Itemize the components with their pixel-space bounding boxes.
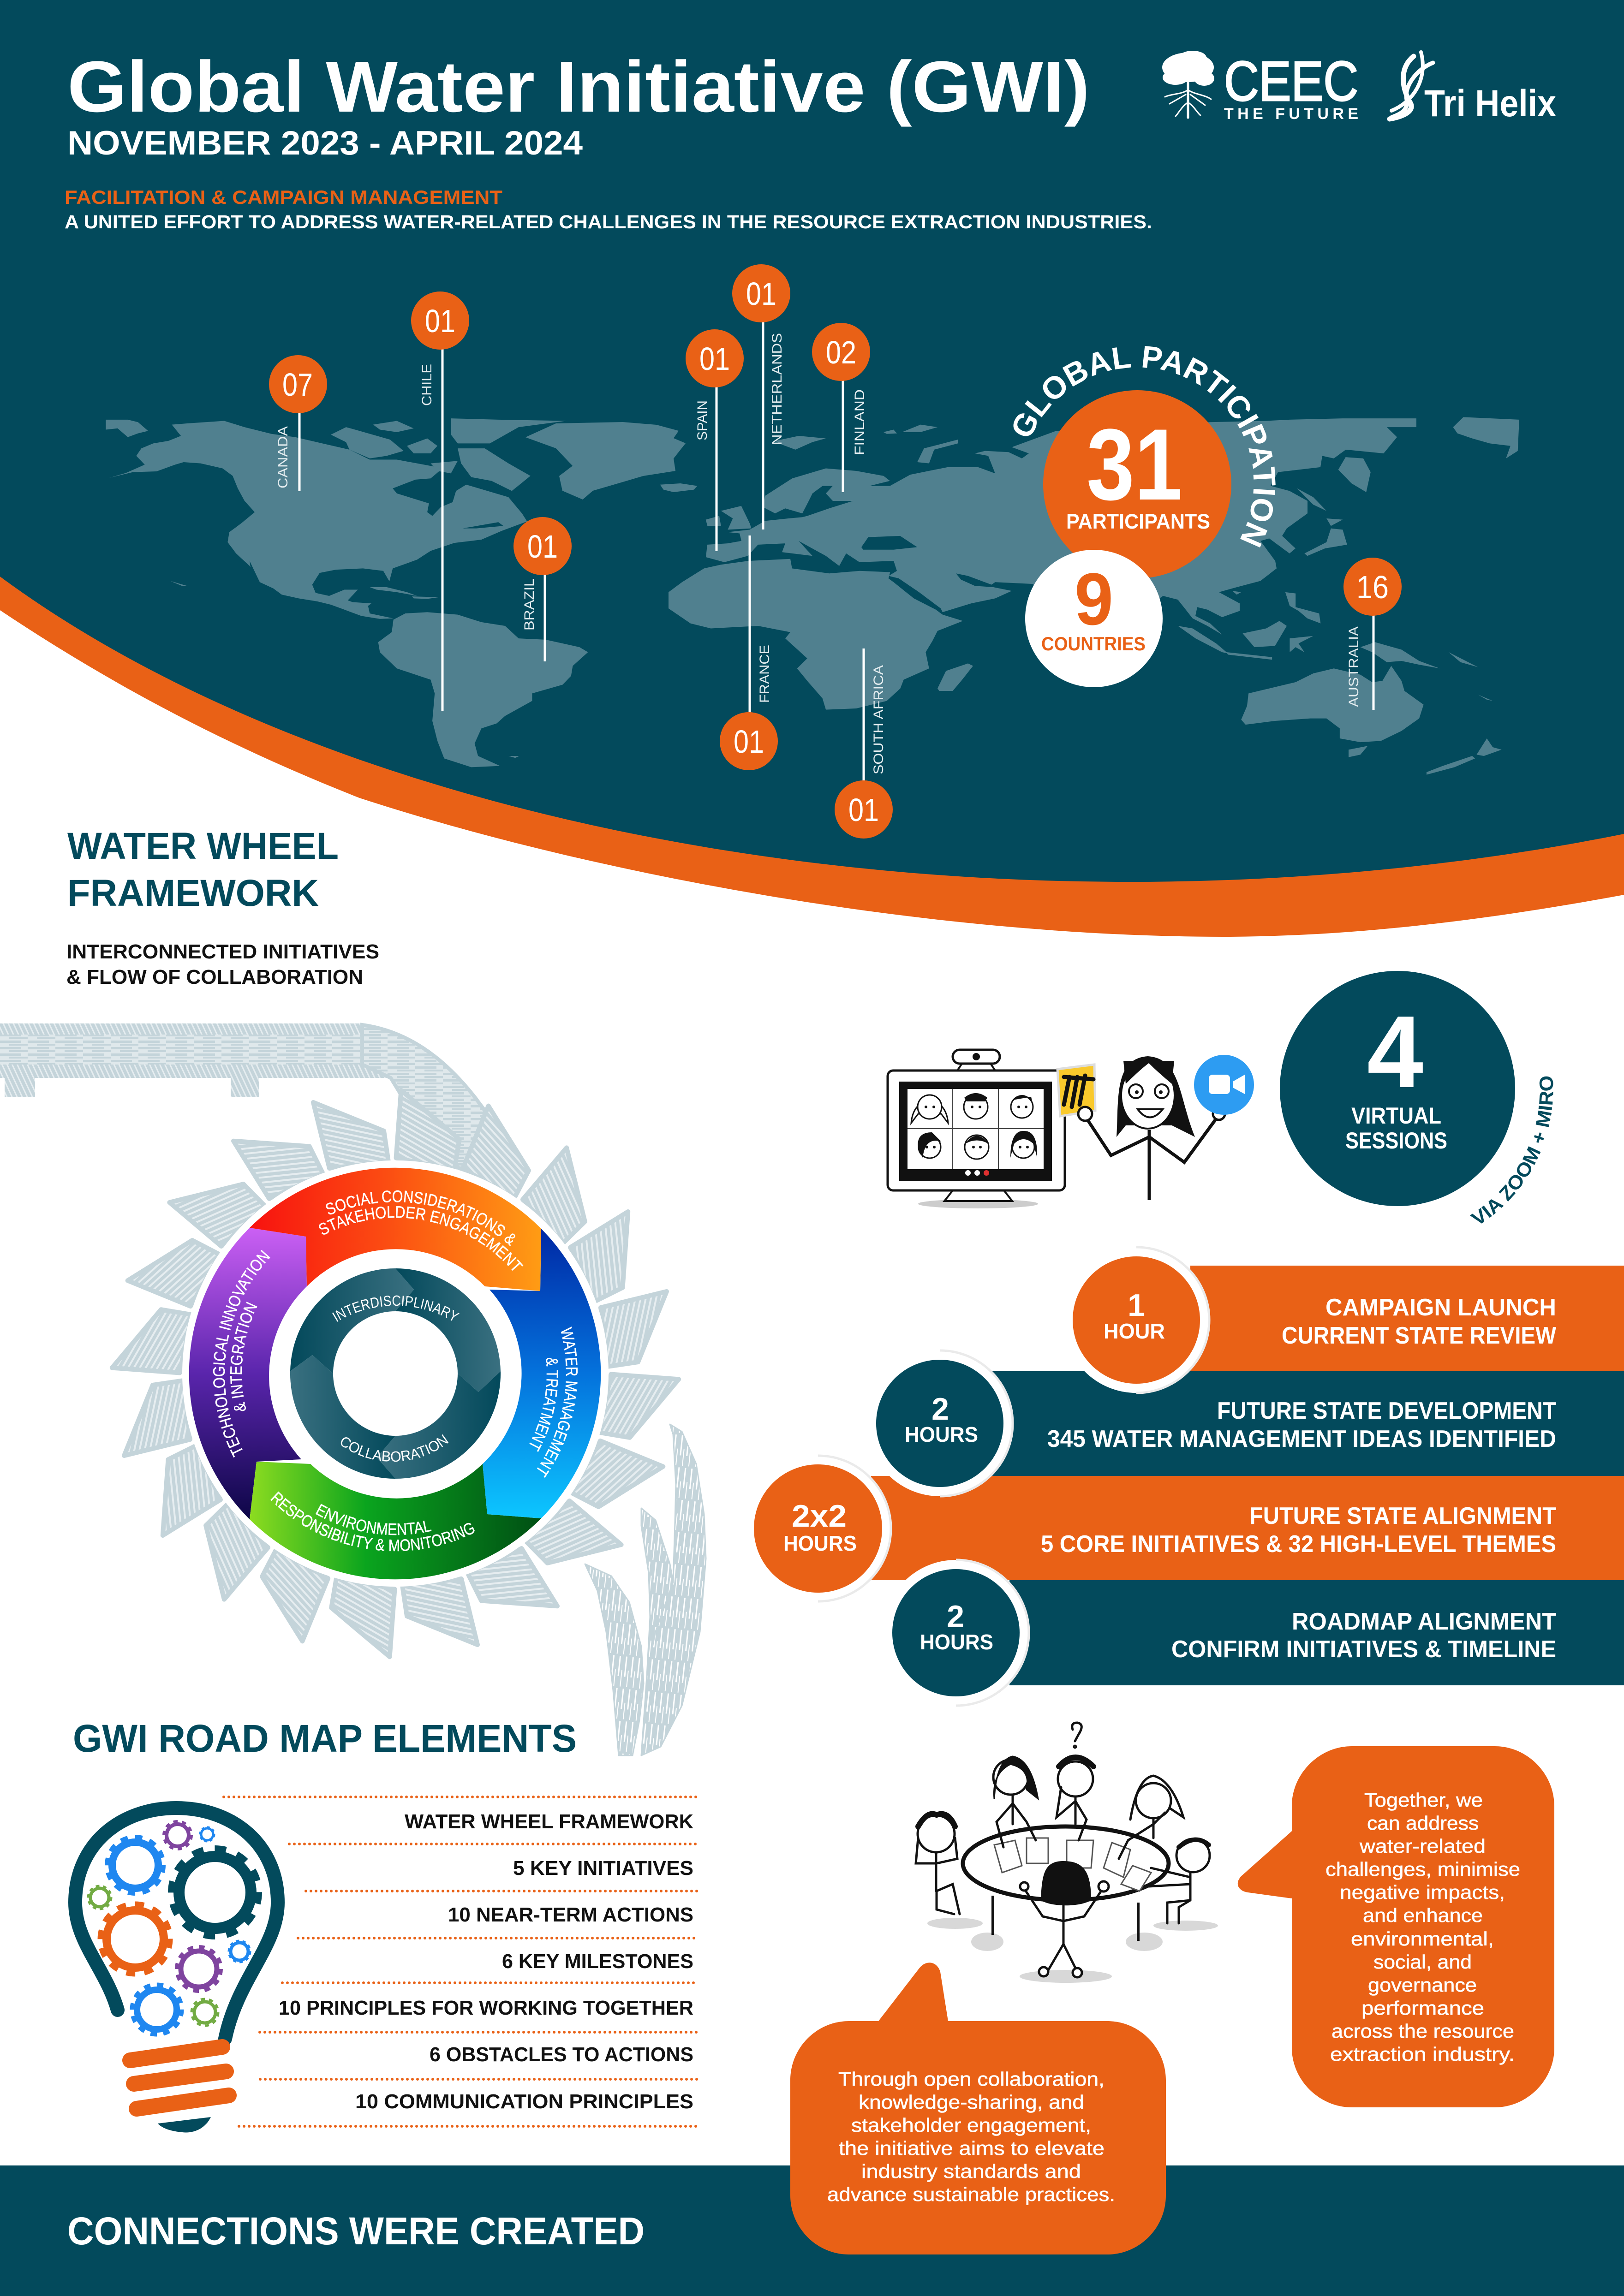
illustration: video call with monitor	[888, 1050, 1254, 1208]
subheading: interconnected initiatives: INTERCONNECTED INITIATIVES	[66, 940, 379, 963]
list item: 10 PRINCIPLES FOR WORKING TOGETHER	[279, 1997, 693, 2019]
stat: 4 virtual sessions	[1280, 971, 1515, 1206]
segment: environmental responsibility: RESPONSIBILITY & MONITORING	[267, 1488, 478, 1555]
person thinking	[1058, 1761, 1093, 1796]
speech bubble: together: can address	[1367, 1812, 1479, 1834]
pin: Netherlands 01	[732, 264, 790, 529]
band: future state development	[992, 1371, 1624, 1476]
stat: 31 participants	[1043, 390, 1231, 578]
facilitation line: FACILITATION & CAMPAIGN MANAGEMENT	[65, 186, 502, 208]
timeline bands	[871, 1266, 1624, 1685]
pin: France 01: 01	[734, 724, 764, 760]
pin: Spain 01: 01	[699, 341, 730, 377]
water flume illustration	[0, 1023, 513, 1172]
stat: 4 virtual sessions: 4	[1367, 995, 1423, 1109]
band: roadmap alignment	[1009, 1580, 1624, 1685]
segment: water management	[483, 1229, 601, 1518]
person left	[918, 1815, 955, 1852]
speech bubble: through open collaboration: Through open collaboration,	[838, 2068, 1105, 2090]
table	[963, 1826, 1169, 1900]
icon: zoom logo	[1194, 1055, 1254, 1115]
water wheel diagram	[112, 1090, 679, 1657]
speech bubble: together	[1238, 1746, 1554, 2107]
person right	[1176, 1839, 1210, 1872]
segment: water management: WATER MANAGEMENT	[532, 1326, 581, 1480]
segment: social considerations: STAKEHOLDER ENGAGEMENT	[316, 1202, 526, 1276]
badge: 2 hours	[867, 1350, 1013, 1496]
pin: Chile 01: CHILE	[419, 364, 435, 406]
speech bubble: through open collaboration: stakeholder engagement,	[851, 2114, 1091, 2136]
list item: 5 KEY INITIATIVES	[513, 1857, 693, 1880]
speech bubble: together: governance	[1368, 1974, 1477, 1996]
band: campaign launch: CAMPAIGN LAUNCH	[1325, 1294, 1556, 1321]
pin: Chile 01: 01	[425, 303, 455, 339]
logo: CEEC the future: CEEC	[1224, 50, 1358, 113]
segment: social considerations: SOCIAL CONSIDERATIONS &	[323, 1187, 520, 1249]
speech bubble: through open collaboration	[790, 1963, 1166, 2254]
waterfall illustration	[585, 1424, 706, 1755]
stat: 4 virtual sessions: SESSIONS	[1345, 1128, 1447, 1154]
list item: 10 COMMUNICATION PRINCIPLES	[355, 2090, 693, 2113]
stat: 31 participants: 31	[1087, 408, 1182, 521]
pin: Brazil 01	[513, 517, 572, 661]
road map list	[224, 1797, 698, 2126]
africa and northern islands	[660, 425, 973, 710]
speech bubble: through open collaboration: the initiative aims to elevate	[839, 2137, 1105, 2159]
stat: 9 countries	[1025, 550, 1163, 687]
icon: light bulb with gears	[75, 1808, 278, 2132]
badge: 2x2 hours	[745, 1456, 891, 1601]
badge: 1 hour: HOUR	[1104, 1319, 1165, 1343]
eurasia	[706, 418, 1416, 635]
bulb outline	[75, 1808, 278, 2039]
badge: 2 hours: 2	[931, 1392, 949, 1427]
speech bubble: together: negative impacts,	[1340, 1881, 1505, 1903]
speech bubble: together: extraction industry.	[1330, 2043, 1515, 2065]
list item: WATER WHEEL FRAMEWORK	[405, 1810, 693, 1833]
pin: Spain 01: SPAIN	[695, 400, 710, 440]
speech bubble: together: performance	[1361, 1997, 1484, 2019]
pin: Netherlands 01: NETHERLANDS	[770, 333, 785, 445]
wheel blades	[112, 1090, 679, 1657]
global participation arc heading: GLOBAL PARTICIPATION	[1004, 339, 1282, 552]
pin: Australia 16	[1343, 558, 1402, 710]
badge: 2 hours roadmap: 2	[947, 1599, 964, 1634]
pin: Finland 02: FINLAND	[852, 389, 867, 455]
heading: water wheel framework: FRAMEWORK	[67, 872, 319, 914]
stat: 9 countries: 9	[1075, 558, 1113, 640]
pin: Canada 07	[269, 355, 327, 491]
pin: Canada 07: 07	[282, 367, 313, 403]
band: campaign launch: CURRENT STATE REVIEW	[1282, 1322, 1557, 1349]
icon: helix	[1390, 52, 1433, 119]
speech bubble: together: social, and	[1373, 1951, 1472, 1973]
segment: technological innovation: & INTEGRATION	[227, 1299, 261, 1414]
pin: Brazil 01: BRAZIL	[522, 578, 537, 631]
asia pacific	[1178, 417, 1519, 775]
pin: South Africa 01	[835, 648, 893, 839]
badge: 2x2 hours: HOURS	[783, 1531, 857, 1555]
pin: Canada 07: CANADA	[275, 426, 291, 488]
heading: water wheel framework: WATER WHEEL	[67, 825, 339, 867]
list item: 6 OBSTACLES TO ACTIONS	[430, 2043, 693, 2066]
badge: 2x2 hours: 2x2	[792, 1499, 847, 1534]
header background	[0, 0, 1624, 882]
speech bubble: together: and enhance	[1363, 1904, 1483, 1926]
heading: road map elements: GWI ROAD MAP ELEMENTS	[73, 1717, 577, 1760]
band: roadmap alignment: ROADMAP ALIGNMENT	[1292, 1608, 1556, 1635]
pin: France 01: FRANCE	[757, 645, 772, 703]
curved caption: via zoom + miro: VIA ZOOM + MIRO	[1468, 1075, 1558, 1230]
list item: 10 NEAR-TERM ACTIONS	[448, 1903, 693, 1926]
americas	[106, 418, 588, 767]
world map	[106, 417, 1519, 775]
pin: Brazil 01: 01	[527, 529, 558, 565]
stat: 4 virtual sessions: VIRTUAL	[1351, 1103, 1441, 1129]
band: future state alignment	[871, 1476, 1624, 1580]
gears	[88, 1821, 258, 2034]
speech bubble: through open collaboration: industry standards and	[861, 2160, 1081, 2182]
title: Global Water Initiative (GWI)	[67, 47, 1090, 127]
subheading: interconnected initiatives: & FLOW OF COLLABORATION	[66, 966, 363, 988]
badge: 2 hours roadmap	[883, 1560, 1029, 1706]
segment: environmental responsibility	[250, 1462, 541, 1579]
badge: 1 hour: 1	[1128, 1288, 1145, 1323]
segment: water management: & TREATMENT	[525, 1356, 562, 1454]
logo: CEEC the future: THE FUTURE	[1224, 105, 1358, 123]
logo: CEEC the future	[1162, 50, 1358, 123]
icon: miro sticker	[1057, 1065, 1095, 1116]
footer band	[0, 2165, 1624, 2296]
badge: 1 hour	[1063, 1247, 1209, 1393]
date subtitle: NOVEMBER 2023 - APRIL 2024	[67, 125, 583, 162]
speech bubble: together: across the resource	[1331, 2020, 1514, 2042]
pin: Australia 16: AUSTRALIA	[1346, 626, 1361, 707]
band: future state alignment: 5 CORE INITIATIVES & 32 HIGH-LEVEL THEMES	[1041, 1531, 1556, 1558]
illustration: round table discussion	[916, 1723, 1218, 1983]
bulb base	[130, 2047, 229, 2109]
segment: social considerations	[250, 1168, 541, 1291]
segment: technological innovation	[189, 1228, 307, 1519]
list item: 6 KEY MILESTONES	[502, 1950, 693, 1973]
subheading: interconnected initiatives	[66, 940, 379, 988]
speech bubble: through open collaboration: knowledge-sharing, and	[859, 2091, 1084, 2113]
icon: tree	[1162, 51, 1214, 118]
logo: Tri Helix	[1390, 52, 1556, 125]
band: roadmap alignment: CONFIRM INITIATIVES & TIMELINE	[1171, 1636, 1556, 1663]
segment: technological innovation: TECHNOLOGICAL INNOVATION	[209, 1247, 274, 1459]
band: campaign launch	[1190, 1266, 1624, 1371]
footer heading: CONNECTIONS WERE CREATED	[67, 2209, 645, 2253]
pin: Finland 02	[812, 323, 870, 492]
pin: Australia 16: 16	[1356, 569, 1389, 605]
stat: 9 countries: COUNTRIES	[1041, 633, 1146, 654]
inner ring: interdisciplinary collaboration: INTERDISCIPLINARY	[329, 1292, 461, 1325]
pin: France 01	[720, 535, 778, 770]
pin: South Africa 01: 01	[848, 792, 879, 828]
inner ring: interdisciplinary collaboration: COLLABORATION	[337, 1431, 451, 1465]
papers	[994, 1838, 1151, 1891]
person blonde	[1136, 1783, 1171, 1818]
band: future state development: FUTURE STATE DEVELOPMENT	[1217, 1398, 1556, 1424]
pin: Spain 01	[686, 329, 744, 551]
description line: A UNITED EFFORT TO ADDRESS WATER-RELATED CHALLENGES IN THE RESOURCE EXTRACTION INDUSTRIES.	[65, 211, 1152, 232]
pin: Finland 02: 02	[826, 334, 856, 370]
orange swoosh under header	[0, 553, 1624, 937]
badge: 2 hours roadmap: HOURS	[920, 1630, 993, 1654]
monitor	[888, 1050, 1065, 1208]
person woman	[993, 1760, 1028, 1795]
speech bubble: together: Together, we	[1364, 1789, 1483, 1811]
badge: 2 hours: HOURS	[905, 1422, 978, 1446]
speech bubble: together: environmental,	[1351, 1928, 1494, 1950]
logo: Tri Helix: Tri Helix	[1424, 83, 1556, 125]
stat: 31 participants: PARTICIPANTS	[1066, 510, 1210, 533]
person back	[1024, 1889, 1103, 1972]
pin: Netherlands 01: 01	[746, 276, 776, 312]
speech bubble: together: challenges, minimise	[1325, 1858, 1520, 1880]
stick figure with logos	[1078, 1056, 1225, 1200]
band: future state development: 345 WATER MANAGEMENT IDEAS IDENTIFIED	[1047, 1426, 1556, 1452]
inner ring: interdisciplinary collaboration	[290, 1268, 501, 1479]
pin: South Africa 01: SOUTH AFRICA	[871, 665, 886, 774]
speech bubble: together: water-related	[1359, 1835, 1486, 1857]
pin: Chile 01	[411, 291, 469, 711]
greenland	[525, 422, 686, 500]
segment: environmental responsibility: ENVIRONMENTAL	[313, 1500, 433, 1539]
heading: water wheel framework	[67, 825, 339, 914]
speech bubble: through open collaboration: advance sustainable practices.	[827, 2183, 1115, 2205]
band: future state alignment: FUTURE STATE ALIGNMENT	[1249, 1503, 1556, 1529]
